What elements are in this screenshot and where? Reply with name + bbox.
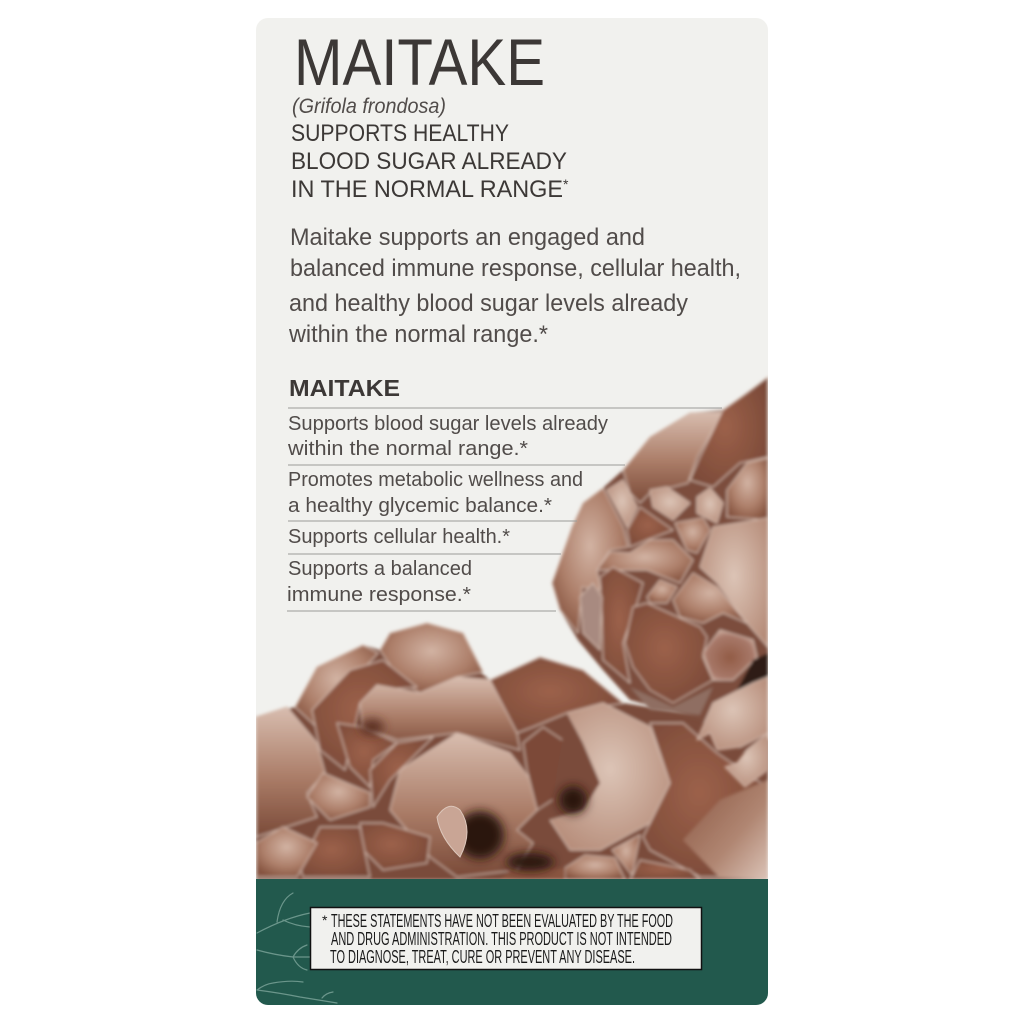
latin name: (Grifola frondosa)	[292, 95, 446, 118]
icon: mushroom tongue over hollow	[437, 806, 467, 857]
disclaimer box: THESE STATEMENTS HAVE NOT BEEN EVALUATED BY THE FOOD	[331, 911, 673, 931]
body paragraph	[288, 224, 741, 348]
icon: dark mushroom hollows	[360, 719, 587, 871]
disclaimer box: AND DRUG ADMINISTRATION. THIS PRODUCT IS NOT INTENDED	[331, 929, 672, 949]
body paragraph: balanced immune response, cellular health,	[290, 255, 741, 282]
subheading: SUPPORTS HEALTHY	[291, 120, 509, 147]
section heading: MAITAKE	[289, 375, 400, 401]
body paragraph: Maitake supports an engaged and	[290, 224, 645, 251]
subheading: BLOOD SUGAR ALREADY	[291, 148, 567, 175]
panel: green footer band	[256, 879, 768, 1005]
icon: pale branch decoration	[257, 893, 337, 1003]
benefits list: Supports cellular health.*	[288, 526, 510, 548]
benefits list: Promotes metabolic wellness and	[288, 469, 583, 491]
benefits list: immune response.*	[287, 584, 471, 606]
panel: product card background	[256, 18, 768, 879]
subheading	[291, 120, 569, 203]
title: MAITAKE	[294, 25, 545, 99]
disclaimer box	[310, 908, 702, 970]
disclaimer box: TO DIAGNOSE, TREAT, CURE OR PREVENT ANY DISEASE.	[330, 947, 635, 967]
illustration: maitake mushroom cluster, upper right	[552, 377, 768, 787]
benefits list: a healthy glycemic balance.*	[288, 495, 552, 517]
subheading: IN THE NORMAL RANGE	[291, 176, 563, 203]
disclaimer box: *	[322, 912, 328, 928]
body paragraph: within the normal range.*	[288, 321, 548, 348]
subheading: *	[563, 176, 569, 192]
benefits list: Supports a balanced	[288, 558, 472, 580]
benefits list: Supports blood sugar levels already	[288, 413, 608, 435]
benefits list	[287, 408, 722, 611]
illustration: maitake mushroom cluster, bottom	[256, 623, 768, 880]
benefits list: within the normal range.*	[287, 438, 528, 460]
body paragraph: and healthy blood sugar levels already	[289, 290, 688, 317]
